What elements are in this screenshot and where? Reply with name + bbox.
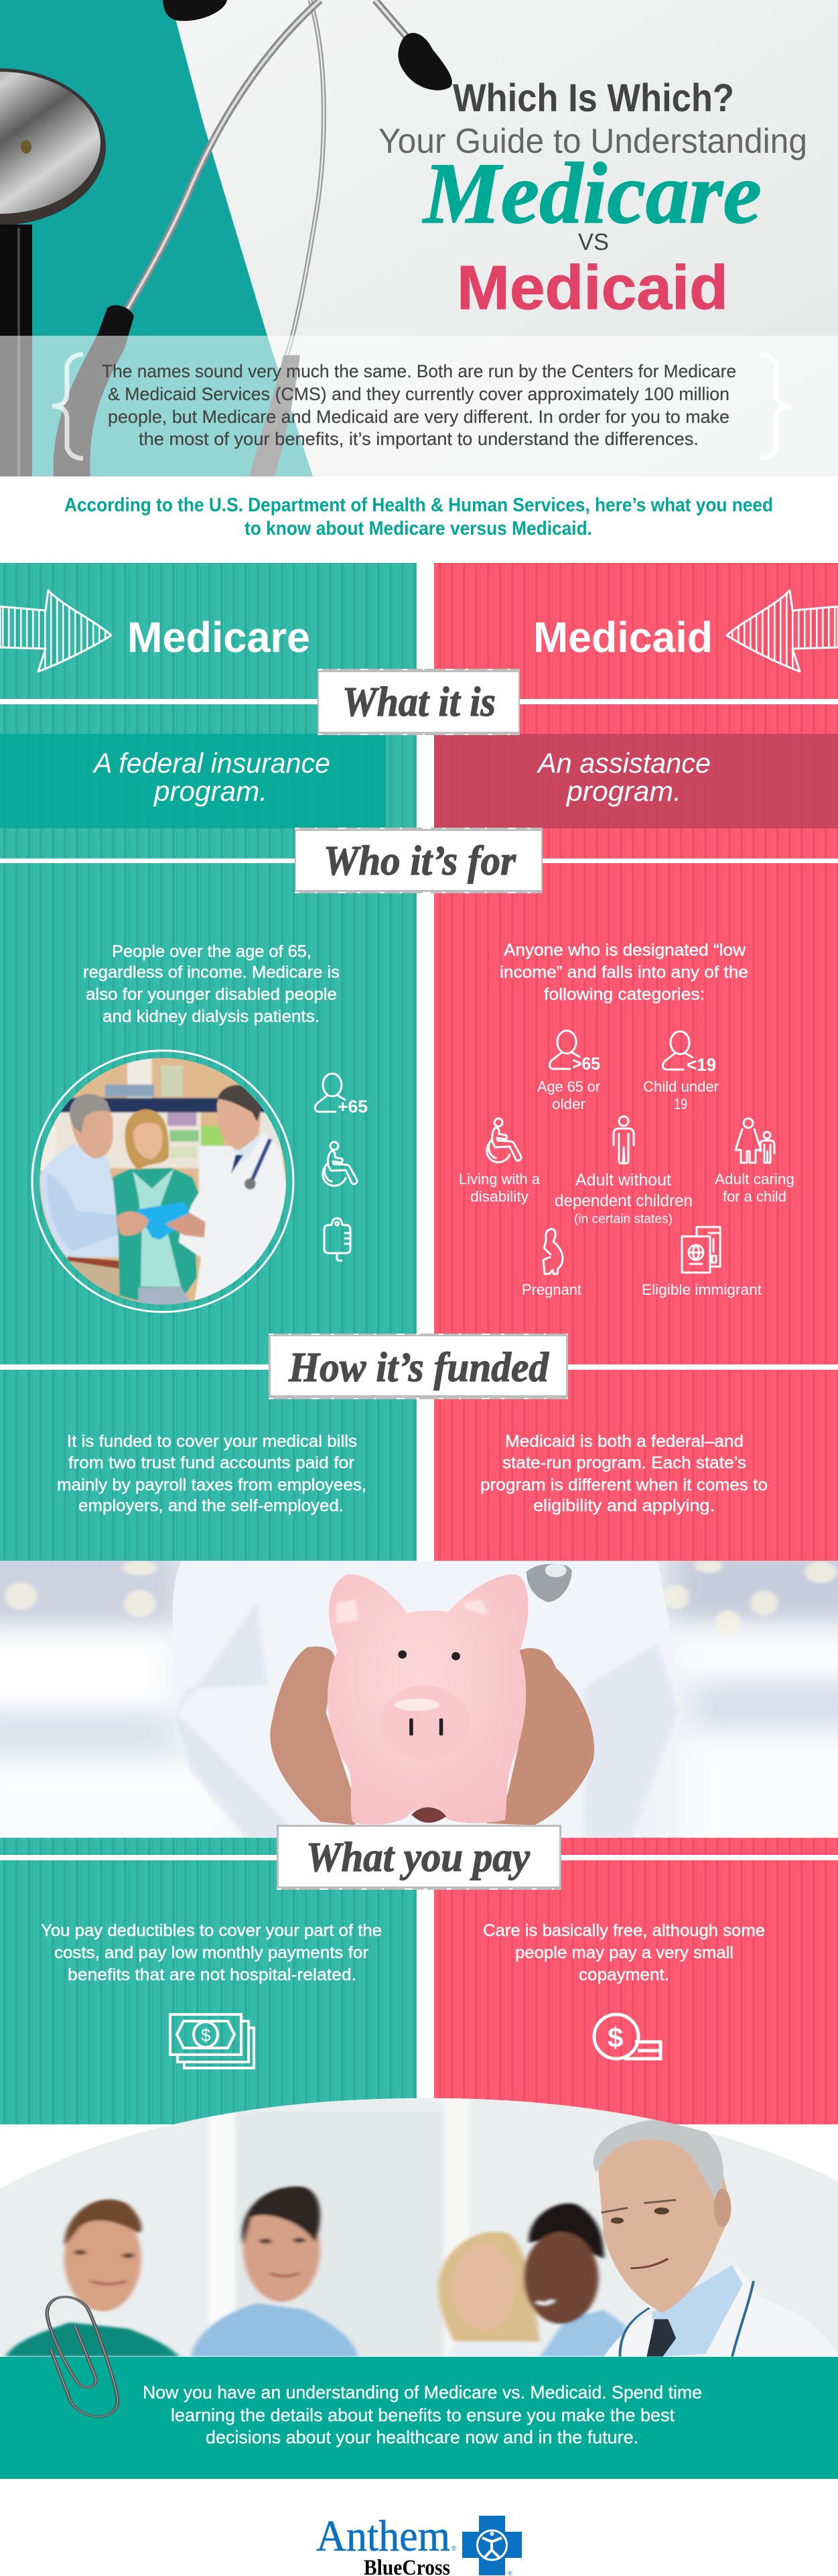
text: assistance program <box>536 747 711 807</box>
doctor coat <box>173 1561 679 1838</box>
text: closing message: Now you have an understanding of Medicare vs. Medicaid. Spend time <box>143 2382 702 2402</box>
category: child under 19: 19 <box>674 1096 687 1112</box>
text: who medicare is for: People over the age of 65, <box>112 942 311 961</box>
text: what medicaid costs: Care is basically free, although some <box>483 1921 765 1940</box>
hero photo: stethoscope on teal cloth <box>0 0 838 476</box>
category: adult without dependent children: dependent children <box>555 1192 693 1210</box>
logo: anthem blue cross: ® <box>451 2545 457 2553</box>
icon: stack of bills: $ <box>201 2025 211 2045</box>
doctor in white coat <box>179 1133 287 1302</box>
piggy bank <box>328 1574 529 1825</box>
label: how it's funded <box>269 1334 568 1399</box>
text: what medicare costs: benefits that are not hospital-related. <box>68 1966 356 1984</box>
title: medicare: Medicare <box>422 145 762 242</box>
label: who it's for <box>295 828 543 893</box>
category: adult caring for a child <box>715 1118 794 1205</box>
category: age 65 or older: older <box>552 1096 585 1112</box>
intro text: The names sound very much the same. Both are run by the Centers for Medicare <box>102 361 736 381</box>
intro text: the most of your benefits, it’s important to understand the differences. <box>139 429 699 449</box>
divider line what it is <box>0 699 838 704</box>
text: who medicare is for: regardless of income. Medicare is <box>83 963 340 982</box>
icon: paperclip <box>47 2297 118 2417</box>
intro text: & Medicaid Services (CMS) and they currently cover approximately 100 million <box>108 384 729 404</box>
text: federal insurance program <box>92 747 330 807</box>
title: which is which: Which Is Which? <box>453 76 734 120</box>
circle photo: patients and doctor <box>0 1031 838 2576</box>
text: who medicare is for: and kidney dialysis patients. <box>102 1007 320 1026</box>
text: how medicaid is funded: program is different when it comes to <box>480 1476 768 1494</box>
icon: striped arrow right <box>727 590 838 671</box>
label: who it's for: Who it’s for <box>324 838 516 884</box>
category: age 65 or older: Age 65 or <box>537 1078 600 1095</box>
panel: medicaid column <box>434 563 838 2124</box>
blurred staff <box>5 2322 179 2357</box>
text: federal insurance program: program. <box>153 775 267 807</box>
intro text: people, but Medicare and Medicaid are very different. In order for you to make <box>108 407 729 427</box>
text: assistance program: An assistance <box>536 747 711 779</box>
icon: left brace <box>52 355 83 458</box>
label: how it's funded: How it’s funded <box>288 1345 549 1391</box>
icon: coin <box>594 2014 660 2059</box>
text: who medicaid is for <box>500 941 748 1004</box>
category: child under 19: <19 <box>687 1055 716 1075</box>
title block <box>378 76 807 322</box>
lead-in text <box>64 495 773 539</box>
panel: closing band <box>0 2357 838 2479</box>
label: what it is: What it is <box>342 680 496 725</box>
text: how medicare is funded: employers, and the self-employed. <box>78 1496 344 1515</box>
band: what it is medicaid <box>434 734 838 828</box>
category: pregnant <box>522 1229 581 1298</box>
category: child under 19 <box>643 1031 719 1112</box>
text: how medicare is funded <box>57 1432 366 1515</box>
lead-in text: According to the U.S. Department of Health & Human Services, here’s what you need <box>64 495 773 516</box>
heading: medicaid: Medicaid <box>533 613 713 661</box>
category: eligible immigrant: Eligible immigrant <box>642 1281 762 1298</box>
divider line how it's funded <box>0 1364 838 1370</box>
intro translucent band <box>0 336 838 476</box>
senior doctor in focus <box>604 2265 838 2357</box>
icon: person over 65: +65 <box>338 1096 368 1116</box>
text: what medicare costs: costs, and pay low monthly payments for <box>54 1943 368 1962</box>
panel: medicare column <box>0 563 417 2124</box>
divider line what you pay <box>0 1855 838 1860</box>
subtitle: Your Guide to Understanding <box>378 122 807 161</box>
icon: right brace <box>760 355 791 458</box>
text: what medicare costs: You pay deductibles to cover your part of the <box>41 1921 382 1940</box>
text: how medicare is funded: mainly by payroll taxes from employees, <box>57 1476 366 1494</box>
icon: person over 65 <box>315 1074 368 1116</box>
text: how medicare is funded: It is funded to cover your medical bills <box>67 1432 357 1451</box>
photo: medical team <box>0 2096 838 2376</box>
icon: striped arrow left <box>0 590 111 671</box>
text: how medicaid is funded: eligibility and applying. <box>533 1496 715 1515</box>
icon: stack of bills <box>170 2014 254 2068</box>
heading: medicare: Medicare <box>127 613 310 661</box>
title: vs: VS <box>578 229 609 255</box>
category: adult caring for a child: Adult caring <box>715 1171 794 1187</box>
logo: anthem blue cross: Anthem <box>316 2512 450 2561</box>
label: what you pay <box>277 1825 561 1890</box>
label: what you pay: What you pay <box>306 1835 530 1880</box>
category: adult without dependent children: Adult without <box>575 1171 671 1189</box>
text: who medicare is for <box>83 942 340 1026</box>
text: how medicaid is funded <box>480 1432 768 1515</box>
text: closing message: decisions about your healthcare now and in the future. <box>206 2427 638 2447</box>
icon: coin: $ <box>608 2022 623 2053</box>
photo: piggy bank held by doctor <box>0 1548 838 1849</box>
icon: wheelchair <box>323 1142 357 1185</box>
category: living with a disability: disability <box>470 1188 529 1205</box>
text: who medicare is for: also for younger disabled people <box>86 985 337 1004</box>
text: who medicaid is for: following categories: <box>544 985 705 1004</box>
category: adult without dependent children: (in certain states) <box>574 1212 673 1226</box>
band: what it is medicare <box>0 734 386 828</box>
text: what medicaid costs <box>483 1921 765 1984</box>
category: adult without dependent children <box>555 1116 693 1226</box>
category: age 65 or older: >65 <box>572 1053 600 1074</box>
intro text <box>102 361 736 449</box>
divider line who it's for <box>0 858 838 863</box>
category: pregnant: Pregnant <box>522 1281 581 1298</box>
text: how medicaid is funded: Medicaid is both a federal–and <box>505 1432 744 1451</box>
text: who medicaid is for: income” and falls into any of the <box>500 963 748 982</box>
text: closing message: learning the details about benefits to ensure you make the best <box>171 2405 675 2425</box>
text: how medicaid is funded: state-run program. Each state’s <box>502 1454 746 1472</box>
woman in green cardigan <box>113 1168 201 1301</box>
logo: anthem blue cross <box>316 2512 522 2576</box>
title: medicaid: Medicaid <box>457 253 728 322</box>
text: closing message <box>143 2382 702 2447</box>
text: what medicaid costs: copayment. <box>579 1966 669 1984</box>
text: assistance program: program. <box>565 775 681 807</box>
man in blue shirt <box>40 1144 122 1258</box>
category: living with a disability: Living with a <box>459 1171 541 1187</box>
category: child under 19: Child under <box>643 1078 719 1095</box>
icon: iv bag <box>324 1218 350 1261</box>
category: age 65 or older <box>537 1031 600 1112</box>
text: federal insurance program: A federal insurance <box>92 747 330 779</box>
text: who medicaid is for: Anyone who is designated “low <box>504 941 746 960</box>
text: how medicare is funded: from two trust fund accounts paid for <box>68 1454 354 1472</box>
text: what medicare costs <box>41 1921 382 1984</box>
lead-in text: to know about Medicare versus Medicaid. <box>245 518 592 539</box>
category: living with a disability <box>459 1118 541 1205</box>
text: what medicaid costs: people may pay a very small <box>515 1943 734 1962</box>
category: adult caring for a child: for a child <box>723 1188 786 1205</box>
label: what it is <box>318 669 520 735</box>
hands <box>270 1647 356 1825</box>
category: eligible immigrant <box>642 1227 762 1298</box>
tablet and hands <box>136 1202 192 1240</box>
